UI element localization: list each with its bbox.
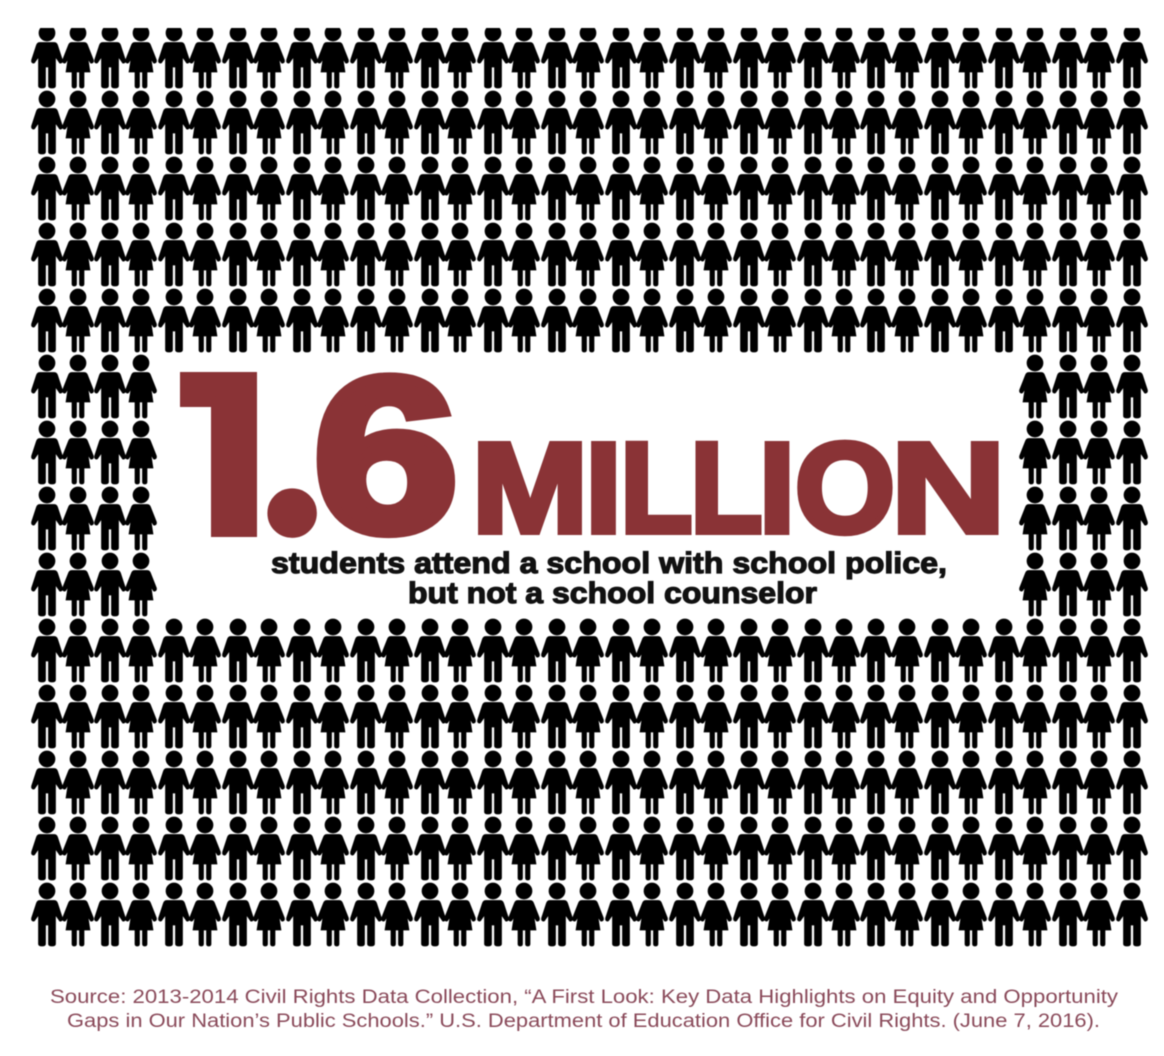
subheading: students attend a school with school police,: [271, 547, 947, 580]
source note: [50, 987, 1119, 1032]
big word: MILLION: L: [620, 417, 692, 560]
big number: 1.6: [179, 371, 456, 539]
big number: 1.6: 1: [164, 328, 293, 587]
source note: Source: 2013-2014 Civil Rights Data Collection, “A First Look: Key Data Highlights on Equity and Opportunity: [50, 987, 1119, 1008]
source note: Gaps in Our Nation’s Public Schools.” U.S. Department of Education Office for Civil Rights. (June 7, 2016).: [67, 1011, 1100, 1032]
big word: MILLION: O: [795, 417, 895, 560]
subheading: but not a school counselor: [408, 577, 817, 610]
big number: 1.6: 6: [313, 333, 459, 578]
big word: MILLION: L: [690, 417, 762, 560]
big number: 1.6: .: [254, 262, 330, 600]
big word: MILLION: N: [891, 417, 1006, 560]
big word: MILLION: M: [472, 417, 588, 560]
big word: MILLION: I: [586, 417, 622, 560]
big word: MILLION: I: [759, 417, 795, 560]
subheading: [271, 547, 947, 610]
